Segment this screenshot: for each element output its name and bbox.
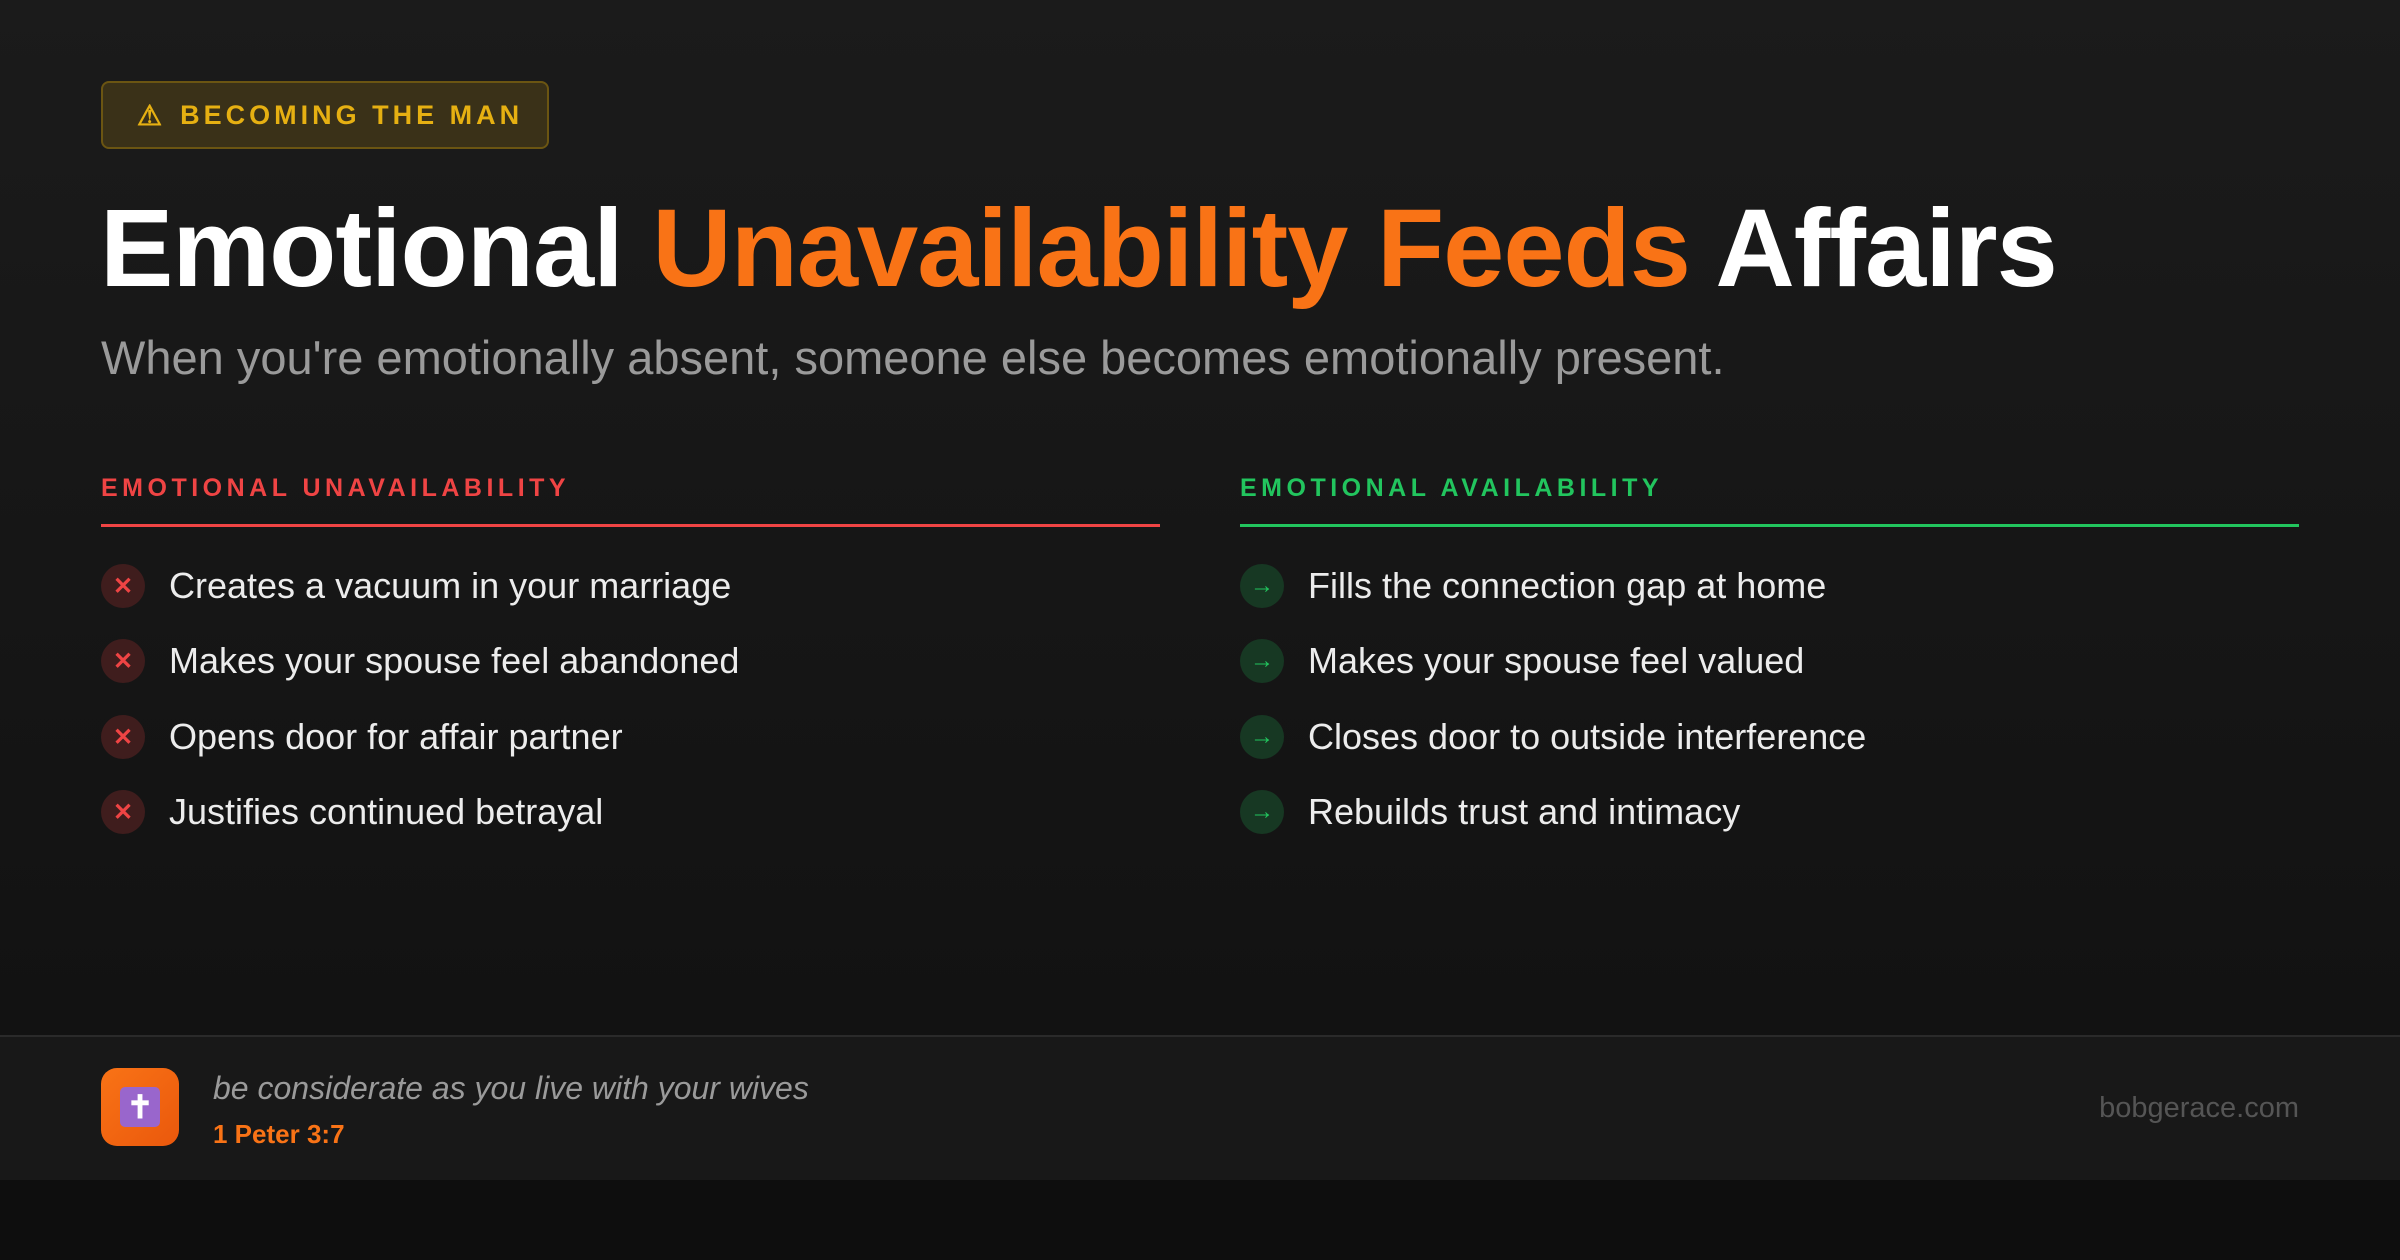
item 2: Makes your spouse feel abandoned [169,640,739,681]
item 1: → [1250,572,1274,599]
website: bobgerace.com [2099,1092,2299,1124]
heading: availability: EMOTIONAL AVAILABILITY [1240,474,1663,502]
item 3: → [1250,723,1274,750]
icon: cross: ✝ [127,1089,153,1125]
heading: availability [1240,470,2299,527]
item 3: Opens door for affair partner [169,716,623,757]
item 2: ✕ [113,648,133,674]
item 2: Makes your spouse feel valued [1308,640,1804,681]
panel: emotional unavailability [101,474,1160,834]
item 3: ✕ [113,724,133,750]
quote: be considerate as you live with your wives [213,1070,809,1106]
item 4: ✕ [113,798,133,826]
item 4: Rebuilds trust and intimacy [1308,791,1740,832]
badge: BECOMING THE MAN [180,100,523,130]
item 1: ✕ [113,572,133,600]
icon: cross [101,1068,179,1146]
heading: unavailability: EMOTIONAL UNAVAILABILITY [101,474,570,502]
item 1: Fills the connection gap at home [1308,565,1826,606]
badge [101,81,549,149]
item 3: Closes door to outside interference [1308,716,1866,757]
subtitle: When you're emotionally absent, someone else becomes emotionally present. [101,331,1725,384]
item 4: → [1250,798,1274,825]
item 4: Justifies continued betrayal [169,791,603,832]
item 2: → [1250,647,1274,674]
reference: 1 Peter 3:7 [213,1119,345,1149]
panel: emotional availability [1240,474,2299,834]
footer [0,1035,2400,1180]
badge: ⚠ [137,100,166,130]
title: Emotional Unavailability Feeds Affairs [100,187,2057,310]
heading: unavailability [101,470,1160,527]
item 1: Creates a vacuum in your marriage [169,565,731,606]
